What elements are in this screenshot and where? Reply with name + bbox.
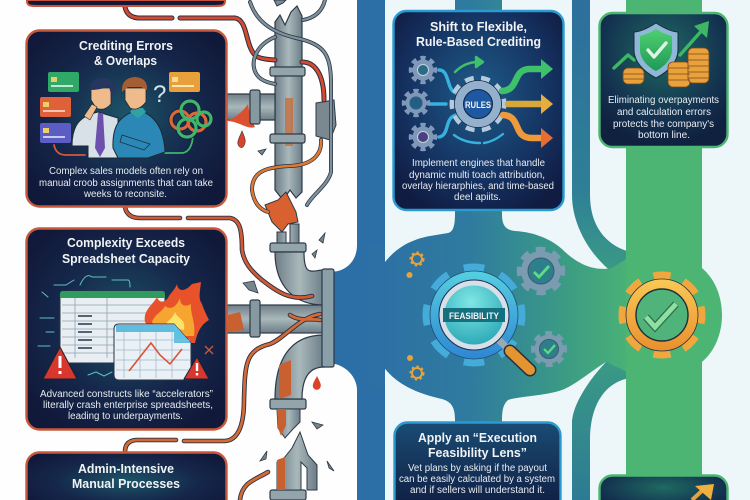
arrow: green <box>502 59 553 91</box>
pipe: flanges <box>270 67 306 500</box>
pipe: mid section <box>277 224 299 243</box>
heading <box>418 430 537 460</box>
body text: Advanced constructs like “accelerators” <box>40 389 213 400</box>
heading: Rule-Based Crediting <box>416 34 541 49</box>
pipe: rust break <box>265 192 298 232</box>
pipe: upper vertical segment <box>275 6 302 200</box>
icon: check gear upper <box>520 250 562 292</box>
panel: Shift to Flexible, Rule-Based Crediting <box>394 11 564 210</box>
heading: Crediting Errors <box>79 38 173 53</box>
icon: large orange check gear <box>624 277 700 353</box>
chart: front spreadsheet with line <box>114 324 191 380</box>
heading <box>72 461 180 491</box>
connectors <box>54 135 193 155</box>
heading: Spreadsheet Capacity <box>62 251 191 266</box>
arrow: orange <box>503 115 553 148</box>
connectors into rules gear <box>431 70 456 137</box>
body text: Eliminating overpayments <box>608 95 719 106</box>
icon: warning right <box>184 357 209 379</box>
heading: Manual Processes <box>72 476 180 491</box>
pipe: top fragment <box>274 0 286 6</box>
pipe: horizontal branch with rust leak <box>227 90 275 148</box>
icon: man with tie <box>72 78 118 158</box>
pipe: rust patch <box>279 360 291 399</box>
panel: Apply an Execution Feasibility Lens <box>394 422 560 500</box>
icon: small x <box>205 346 213 354</box>
body text <box>399 463 555 496</box>
panel: Complexity Exceeds Spreadsheet Capacity <box>26 228 226 430</box>
icon: rules gear <box>453 79 503 129</box>
icon: warning left <box>43 347 77 379</box>
icon: flame <box>145 282 209 343</box>
top left card remnant <box>27 0 225 6</box>
wire: grey loop <box>250 0 331 205</box>
chart: back spreadsheet window <box>60 291 165 363</box>
pipe shards <box>243 149 334 471</box>
panel: Admin-Intensive Manual Processes <box>26 452 226 500</box>
icon: man with arms crossed <box>113 77 165 158</box>
body text: leading to underpayments. <box>68 411 183 422</box>
broken pipe system <box>227 0 336 500</box>
body text: and calculation errors <box>617 107 711 118</box>
heading: Admin-Intensive <box>78 461 174 476</box>
icon: green arrow <box>614 21 709 68</box>
flow network: blue and green channels <box>330 0 722 500</box>
panel: bottom line protection <box>600 13 728 147</box>
body text: can be easily calculated by a system <box>399 474 555 485</box>
panel: Crediting Errors & Overlaps <box>26 30 226 206</box>
icon: question mark: ? <box>153 81 166 108</box>
icon: tangled knot <box>171 101 211 137</box>
wire: second card link <box>125 207 312 298</box>
formula doodles <box>38 276 130 376</box>
body text: bottom line. <box>638 130 690 141</box>
heading: Complexity Exceeds <box>67 235 185 250</box>
body text: manual croob assignments that can take <box>39 178 213 189</box>
pipe: bottom broken segment <box>277 432 317 490</box>
icon: orange arrow <box>692 484 714 500</box>
pipe: large flange <box>322 269 334 367</box>
icon: small orange gears and dots <box>406 253 423 379</box>
magnifier handle <box>500 341 530 370</box>
heading: Shift to Flexible, <box>430 19 527 34</box>
arrow: yellow <box>508 94 553 114</box>
body text: overlay hierarphies, and time-based <box>402 181 554 192</box>
icon: coin stacks <box>623 48 709 87</box>
body text: Implement engines that handle <box>412 158 545 169</box>
arrows: small curved <box>454 57 503 143</box>
body text: dynamic multi toach attribution, <box>409 170 545 181</box>
body text: weeks to reconsite. <box>83 189 167 200</box>
heading <box>62 235 191 266</box>
icon: rules gear: RULES <box>465 100 491 111</box>
pipe: horizontal branch lower <box>227 300 323 337</box>
heading <box>416 19 541 49</box>
panel: bottom right card <box>600 476 728 500</box>
icon: credit cards <box>40 72 200 143</box>
body text: literally crash enterprise spreadsheets, <box>43 400 213 411</box>
body text: protects the company's <box>613 119 714 130</box>
heading: Feasibility Lens” <box>428 445 527 460</box>
icon: shield <box>634 23 678 78</box>
pipe: upper elbow <box>275 252 324 305</box>
body text: deel apiits. <box>454 192 501 203</box>
heading <box>79 38 173 68</box>
icon: feasibility gear and magnifier <box>428 269 530 370</box>
body text: Vet plans by asking if the payout <box>408 463 547 474</box>
wire: red outline <box>125 7 324 100</box>
body text: and if sellers will understand it. <box>410 485 545 496</box>
icon: check gear lower <box>534 334 564 364</box>
leak drop <box>313 376 321 390</box>
lens label: FEASIBILITY <box>449 311 500 322</box>
body text <box>608 95 719 141</box>
body text <box>39 166 213 200</box>
wire: orange loop <box>252 140 321 212</box>
pipe: segment after lower flange <box>277 409 300 438</box>
wire: third card link <box>125 314 320 500</box>
heading: & Overlaps <box>94 53 157 68</box>
wiring from cards through pipes <box>125 0 331 500</box>
body text: Complex sales models often rely on <box>49 166 203 177</box>
body text <box>40 389 213 422</box>
wire wrap <box>316 100 336 140</box>
icon: small gears <box>404 58 434 148</box>
body text <box>402 158 554 203</box>
heading: Apply an “Execution <box>418 430 537 445</box>
pipe: lower elbow <box>275 335 324 399</box>
wire: red fill <box>125 7 324 100</box>
pipe: rust streak <box>285 98 293 146</box>
